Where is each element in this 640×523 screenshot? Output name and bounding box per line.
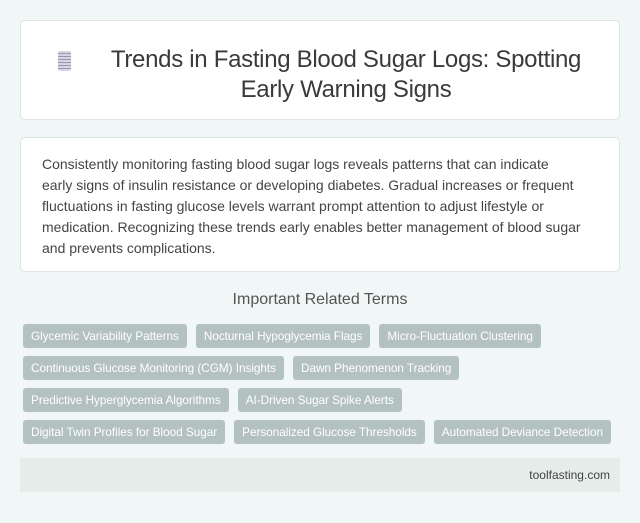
footer [20,458,620,492]
tags list: Nocturnal Hypoglycemia Flags [204,329,362,343]
description text: early signs of insulin resistance or developing diabetes. Gradual increases or frequent [42,177,574,193]
icon: log sheet [58,51,71,71]
tags list: Predictive Hyperglycemia Algorithms [31,393,221,407]
title: Trends in Fasting Blood Sugar Logs: Spotting Early Warning Signs [111,46,581,103]
description card [20,137,620,272]
tags list: Continuous Glucose Monitoring (CGM) Insights [31,361,276,375]
related terms heading: Important Related Terms [233,291,407,308]
description text: medication. Recognizing these trends early enables better management of blood sugar [42,219,581,235]
description text: Consistently monitoring fasting blood sugar logs reveals patterns that can indicate [42,156,549,172]
tags list: AI-Driven Sugar Spike Alerts [246,393,394,407]
tags list: Glycemic Variability Patterns [31,329,179,343]
tags list [23,324,611,444]
tags list: Micro-Fluctuation Clustering [387,329,533,343]
description text [42,156,581,256]
tags list: Dawn Phenomenon Tracking [301,361,451,375]
description text: fluctuations in fasting glucose levels warrant prompt attention to adjust lifestyle or [42,198,544,214]
tags list: Digital Twin Profiles for Blood Sugar [31,425,217,439]
tags list: Automated Deviance Detection [442,425,603,439]
tags list: Personalized Glucose Thresholds [242,425,417,439]
description text: and prevents complications. [42,240,216,256]
source: toolfasting.com [529,468,610,482]
header card [20,20,620,120]
